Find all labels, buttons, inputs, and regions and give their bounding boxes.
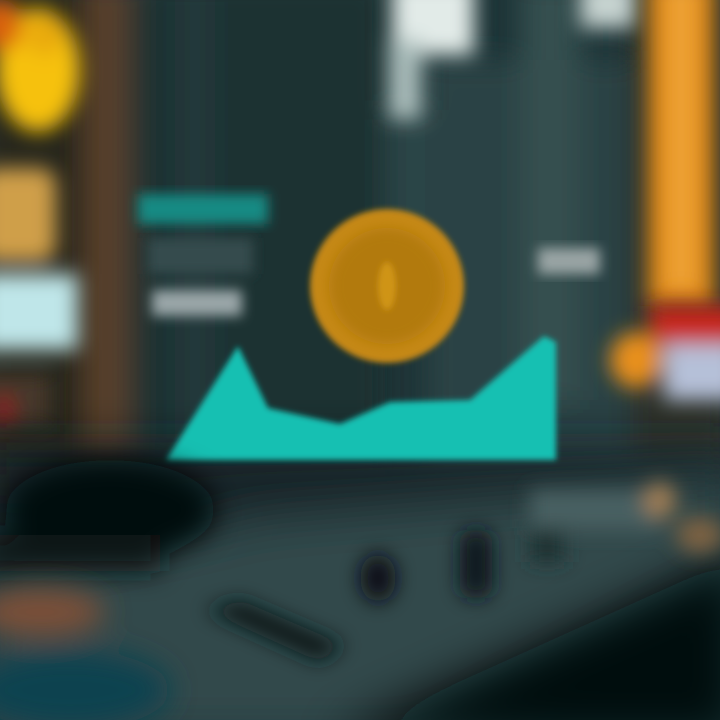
foreground: desk objects [205,482,720,662]
sign: red and white right panel [610,306,720,400]
background: skyline buildings [0,0,720,470]
background: bright sky gaps [388,0,635,120]
foreground: dark bottom right corner [330,555,720,720]
foreground: street surface [0,450,720,720]
foreground: dark silhouette [0,460,215,571]
icon: gold coin [310,209,464,363]
chart heading: teal bar [138,194,268,224]
foreground: bottom left colour patches [0,588,170,720]
sign: left stacked panels [0,168,78,426]
label: right grey text [538,248,600,274]
sign: yellow neon top left [0,0,80,132]
text block: grey lines [148,238,253,316]
chart: teal area chart [166,336,556,460]
sign: orange vertical neon [648,0,714,305]
